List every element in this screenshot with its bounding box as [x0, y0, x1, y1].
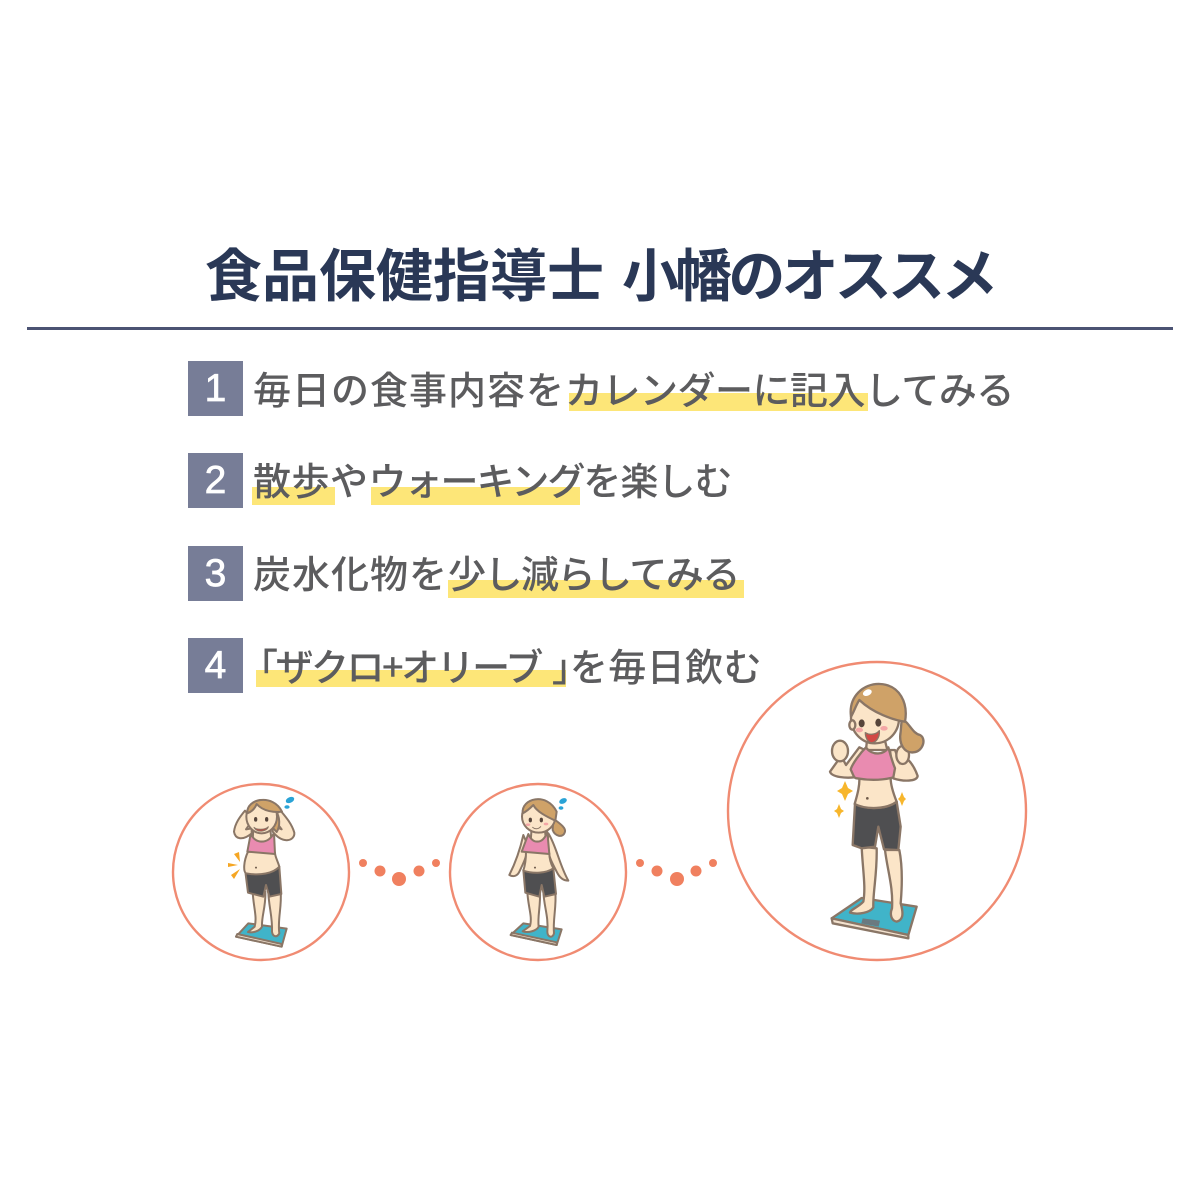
number 4: 4: [205, 644, 226, 687]
item 2 text: 散歩やウォーキングを楽しむ: [253, 451, 731, 506]
icon: sweat drops: [284, 796, 295, 809]
circle 1: worried figure: [173, 784, 349, 960]
item 3 text: 炭水化物を少し減らしてみる: [253, 544, 739, 599]
highlight: walk: [252, 487, 335, 505]
item 4 text: 「ザクロ+オリーブ 」を毎日飲む: [240, 637, 762, 692]
highlight: [448, 580, 744, 598]
divider line: [27, 327, 1173, 330]
number 1: 1: [205, 367, 226, 410]
item 1 text: 毎日の食事内容をカレンダーに記入してみる: [253, 360, 1014, 415]
title: [205, 231, 994, 313]
number 2: 2: [205, 459, 226, 502]
list item 3: [448, 580, 744, 598]
list item 1: [569, 393, 868, 411]
title: 小幡のオススメ: [622, 231, 994, 313]
dots 1: [359, 859, 440, 886]
icon: bulge marks: [228, 852, 240, 879]
number 3: [188, 546, 243, 601]
circle 3: happy figure: [728, 662, 1026, 960]
icon: sparkles: [834, 781, 906, 818]
list item 4: [256, 670, 566, 687]
number 3: 3: [205, 552, 226, 595]
highlight: walking: [371, 487, 580, 505]
number 4: [188, 638, 243, 693]
highlight: [569, 393, 868, 411]
dots 2: [636, 859, 717, 886]
highlight: [256, 670, 566, 687]
number 2: [188, 453, 243, 508]
title: 食品保健指導士: [205, 231, 604, 313]
list item 2: [252, 487, 580, 505]
number 1: [188, 361, 243, 416]
icon: sweat drops: [558, 797, 568, 810]
circle 2: slimmer figure: [450, 784, 626, 960]
